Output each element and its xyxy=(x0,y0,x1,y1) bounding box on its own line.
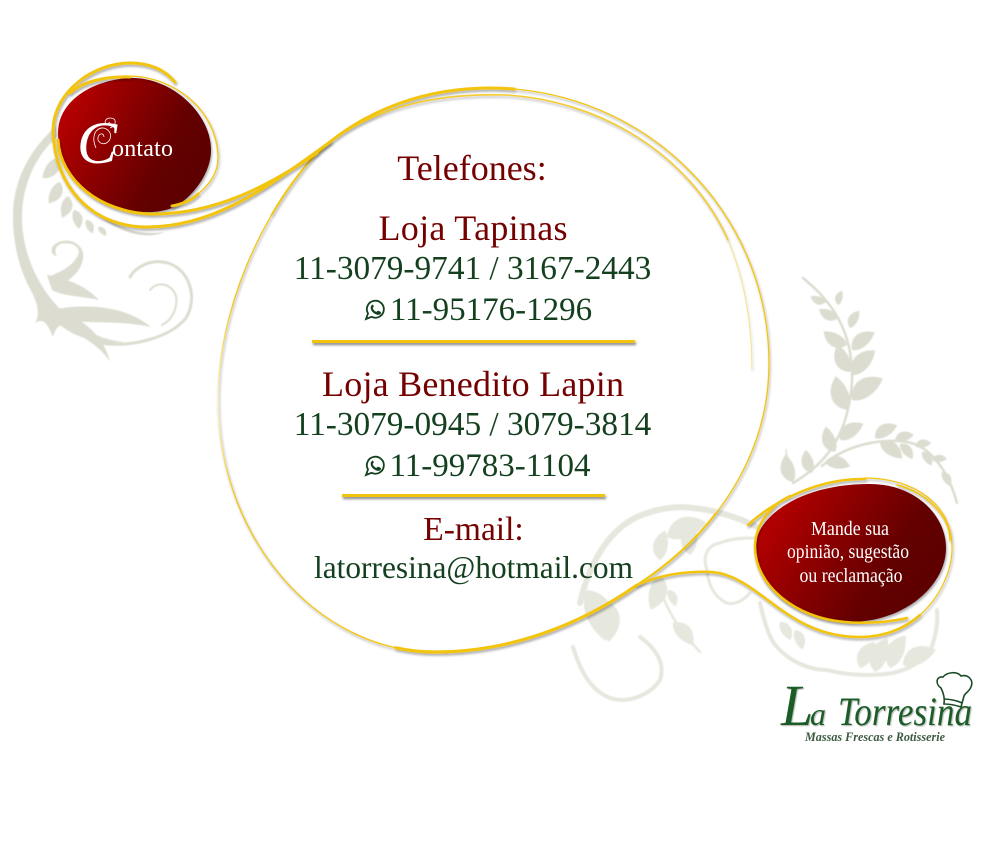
store name: Loja Tapinas xyxy=(378,208,568,248)
bubble: opinion xyxy=(637,478,952,637)
logo wordmark: L xyxy=(780,673,813,738)
bubble: Contato xyxy=(53,63,330,227)
logo: La Torresina xyxy=(780,673,972,744)
foliage: lower flourish behind circle and bubble xyxy=(573,507,938,700)
logo tagline: Massas Frescas e Rotisserie xyxy=(804,729,945,744)
label: opinion message: opinião, sugestão xyxy=(787,541,909,563)
gold ribbons around Contato xyxy=(53,63,330,227)
WhatsApp number: 11-95176-1296 xyxy=(390,292,592,328)
label: opinion message xyxy=(787,518,909,587)
label: opinion message: Mande sua xyxy=(811,518,889,540)
label: opinion message: ou reclamação xyxy=(800,565,902,587)
gold ribbons around opinion bubble xyxy=(637,478,952,637)
bubble shape xyxy=(58,78,211,212)
email address: latorresina@hotmail.com xyxy=(314,549,633,585)
store name: Loja Benedito Lapin xyxy=(322,364,624,404)
divider line xyxy=(312,340,635,343)
logo wordmark xyxy=(780,673,972,738)
icon: WhatsApp xyxy=(366,301,384,319)
bubble shape xyxy=(755,484,946,622)
icon: chef hat xyxy=(937,673,972,707)
block: Loja Tapinas xyxy=(294,208,651,328)
block: E-mail xyxy=(314,511,633,585)
divider line xyxy=(342,494,605,497)
foliage: left flourish xyxy=(13,126,192,362)
label: Contato xyxy=(77,110,173,176)
phone numbers: 11-3079-0945 / 3079-3814 xyxy=(294,406,652,443)
email heading: E-mail: xyxy=(423,511,524,548)
WhatsApp number: 11-99783-1104 xyxy=(389,448,591,484)
label: Contato: ontato xyxy=(112,136,173,162)
logo wordmark: a xyxy=(810,696,826,732)
icon: WhatsApp xyxy=(366,457,384,475)
foliage: right laurel branch xyxy=(777,278,957,503)
label: Contato: C xyxy=(77,110,118,176)
large contact circle outline xyxy=(218,88,769,652)
block: Loja Benedito Lapin xyxy=(294,364,652,484)
logo wordmark: Torresina xyxy=(838,689,972,734)
heading: Telefones: Telefones: xyxy=(397,148,547,188)
phone numbers: 11-3079-9741 / 3167-2443 xyxy=(294,250,651,287)
